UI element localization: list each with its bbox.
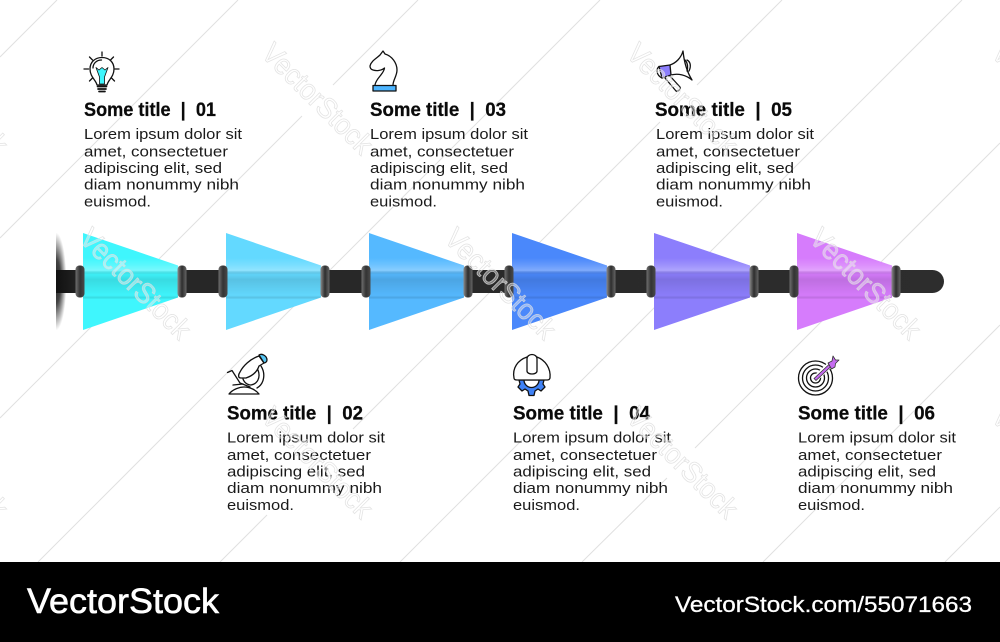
heading and text: step 6: diam nonummy nibh <box>798 480 953 497</box>
watermark text: VectorStock <box>620 37 744 161</box>
icon: target and dart <box>798 356 839 395</box>
heading and text: step 4: adipiscing elit, sed <box>513 464 651 480</box>
arrow 5 <box>646 233 758 330</box>
heading and text: step 5 <box>655 99 815 210</box>
heading and text: step 1: Some title | 01 <box>84 99 216 121</box>
heading and text: step 5: adipiscing elit, sed <box>656 160 794 177</box>
icon: light bulb <box>84 52 119 92</box>
heading and text: step 3: Some title | 03 <box>370 99 506 121</box>
footer image id text: VectorStock.com/55071663 <box>675 592 972 617</box>
footer logo text: VectorStock <box>27 582 220 621</box>
watermark text: VectorStock <box>438 222 562 346</box>
watermark text <box>0 37 1000 525</box>
icon: microscope <box>228 354 267 394</box>
heading and text: step 3: euismod. <box>370 194 437 210</box>
icon: chess knight <box>370 51 397 91</box>
heading and text: step 1: diam nonummy nibh <box>84 176 239 194</box>
heading and text: step 6: euismod. <box>798 497 865 514</box>
footer bar <box>0 562 1000 642</box>
heading and text: step 4: Lorem ipsum dolor sit <box>513 430 672 446</box>
heading and text: step 4 <box>513 402 672 514</box>
heading and text: step 5: euismod. <box>656 194 723 210</box>
icon: hard hat and gear <box>514 354 550 396</box>
heading and text: step 1: amet, consectetuer <box>84 144 228 160</box>
watermark text: VectorStock <box>73 222 197 346</box>
watermark text: VectorStock <box>620 401 744 525</box>
arrow 2 <box>218 233 330 330</box>
heading and text: step 6 <box>798 402 957 514</box>
icon: megaphone <box>657 51 692 91</box>
heading and text: step 1 <box>84 99 243 210</box>
heading and text: step 4: diam nonummy nibh <box>513 480 668 497</box>
heading and text: step 2: amet, consectetuer <box>227 447 371 464</box>
watermark text: VectorStock <box>255 401 379 525</box>
heading and text: step 3: amet, consectetuer <box>370 144 514 160</box>
heading and text: step 2: adipiscing elit, sed <box>227 464 365 480</box>
heading and text: step 3 <box>370 99 529 210</box>
heading and text: step 1: Lorem ipsum dolor sit <box>84 126 243 143</box>
heading and text: step 4: amet, consectetuer <box>513 447 657 464</box>
heading and text: step 5: Some title | 05 <box>655 99 792 121</box>
heading and text: step 6: Lorem ipsum dolor sit <box>798 430 957 446</box>
heading and text: step 2: Lorem ipsum dolor sit <box>227 430 386 446</box>
arrow 1 <box>76 233 186 330</box>
heading and text: step 6: adipiscing elit, sed <box>798 464 936 480</box>
timeline tube <box>56 233 944 330</box>
watermark text: VectorStock <box>255 37 379 161</box>
tube body <box>56 270 944 293</box>
heading and text: step 1: euismod. <box>84 194 151 210</box>
heading and text: step 6: amet, consectetuer <box>798 447 942 464</box>
heading and text: step 4: Some title | 04 <box>513 402 650 424</box>
heading and text: step 5: Lorem ipsum dolor sit <box>656 126 815 143</box>
arrow 3 <box>362 233 472 330</box>
left end shadow <box>56 233 67 330</box>
arrow 6 <box>790 233 900 330</box>
heading and text: step 6: Some title | 06 <box>798 402 935 424</box>
watermark text: VectorStock <box>803 222 927 346</box>
heading and text: step 2 <box>227 402 386 514</box>
heading and text: step 2: euismod. <box>227 497 294 514</box>
heading and text: step 4: euismod. <box>513 497 580 514</box>
arrow 4 <box>504 233 616 330</box>
heading and text: step 3: diam nonummy nibh <box>370 176 525 194</box>
heading and text: step 3: adipiscing elit, sed <box>370 160 508 177</box>
heading and text: step 2: diam nonummy nibh <box>227 480 382 497</box>
heading and text: step 2: Some title | 02 <box>227 402 363 424</box>
heading and text: step 5: diam nonummy nibh <box>656 176 811 194</box>
heading and text: step 3: Lorem ipsum dolor sit <box>370 126 529 143</box>
heading and text: step 1: adipiscing elit, sed <box>84 160 222 177</box>
heading and text: step 5: amet, consectetuer <box>656 144 800 160</box>
